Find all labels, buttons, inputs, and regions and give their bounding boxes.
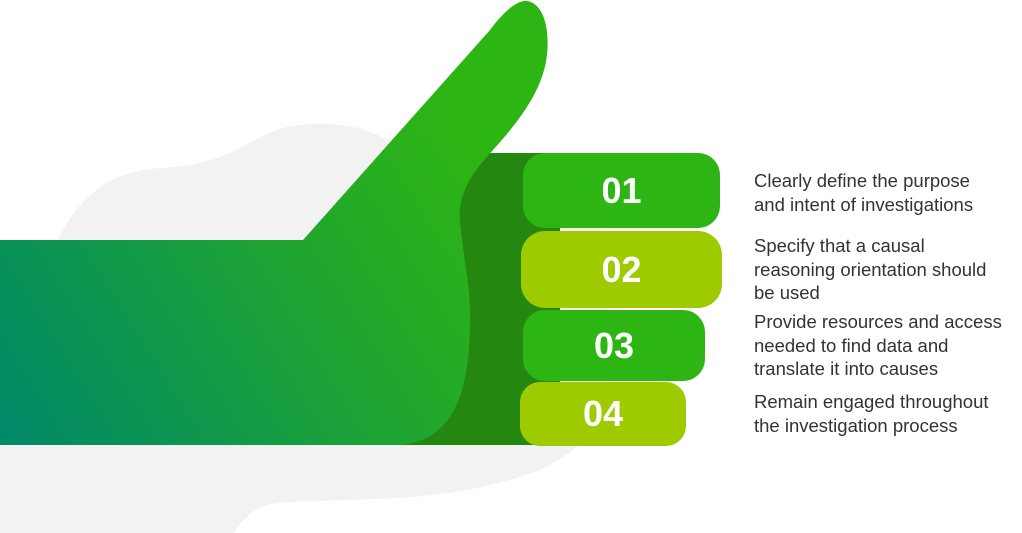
step 04 pill bbox=[520, 382, 686, 446]
text 02: be used bbox=[754, 282, 820, 303]
step 01 pill: 01 bbox=[601, 170, 642, 211]
hand and arm bbox=[0, 1, 548, 445]
dark palm back bbox=[400, 153, 560, 445]
text 04: Remain engaged throughout bbox=[754, 391, 989, 412]
text 03 bbox=[754, 311, 1002, 379]
step 02 pill bbox=[521, 231, 722, 308]
text 03: needed to find data and bbox=[754, 334, 948, 356]
text 03: Provide resources and access bbox=[754, 311, 1002, 332]
text 04 bbox=[754, 391, 989, 436]
step 03 pill bbox=[523, 310, 705, 381]
text 01: and intent of investigations bbox=[754, 194, 973, 214]
text 03: translate it into causes bbox=[754, 358, 938, 379]
step 02 pill: 02 bbox=[601, 249, 642, 290]
text 04: the investigation process bbox=[754, 414, 958, 436]
text 02: reasoning orientation should bbox=[754, 258, 986, 280]
step 03 pill: 03 bbox=[594, 325, 634, 366]
text 02 bbox=[754, 235, 986, 303]
step 04 pill: 04 bbox=[583, 393, 623, 434]
text 01: Clearly define the purpose bbox=[754, 170, 970, 191]
text 02: Specify that a causal bbox=[754, 235, 925, 256]
background blob bbox=[0, 124, 610, 533]
text 01 bbox=[754, 170, 973, 215]
step 01 pill bbox=[523, 153, 720, 228]
